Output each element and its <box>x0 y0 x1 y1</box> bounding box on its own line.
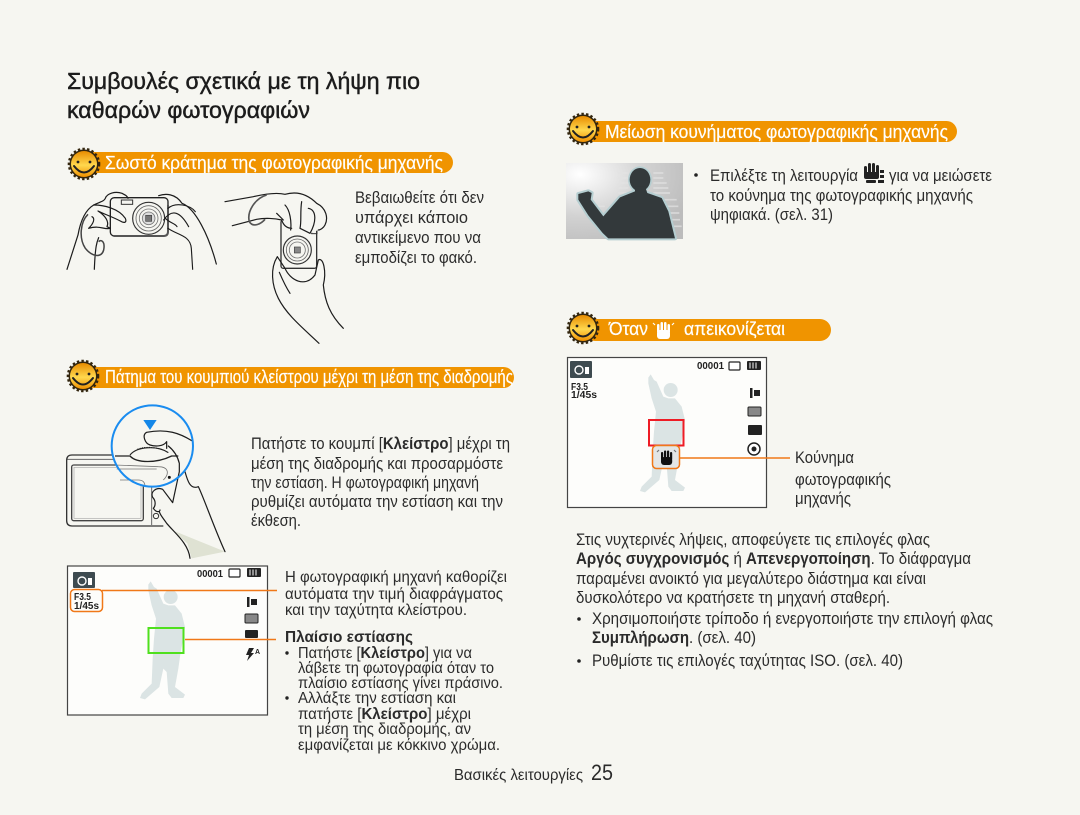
text: focus frame notes <box>285 629 503 754</box>
camera back <box>67 455 173 526</box>
right side icons: A <box>255 649 260 656</box>
label: camera shake: φωτογραφικής <box>795 471 891 489</box>
text: aperture and shutter explanation: και την ταχύτητα κλείστρου. <box>285 602 467 619</box>
illustration: holding camera vertically <box>225 193 343 343</box>
figure silhouette <box>140 581 185 699</box>
footer: section and page number <box>454 760 613 785</box>
text: half-press instructions <box>251 435 510 530</box>
text: focus frame notes: πατήστε [Κλείστρο] μέχρι <box>298 706 471 723</box>
heading: when the shake icon appears: Όταν <box>608 318 648 339</box>
text: select digital stabilisation mode: για να μειώσετε <box>889 167 992 185</box>
icon: white shaking hand <box>653 322 674 339</box>
focus frame in red <box>649 420 684 446</box>
text: check lens obstruction: υπάρχει κάποιο <box>355 209 468 227</box>
text: night shooting advice: παραμένει ανοικτό για μεγαλύτερο διάστημα και είναι <box>576 570 926 588</box>
camera screen: focus frame example <box>68 566 277 715</box>
text: focus frame notes: Αλλάξτε την εστίαση και <box>298 690 456 707</box>
text: night shooting advice <box>576 531 993 670</box>
text: aperture and shutter explanation: Η φωτογραφική μηχανή καθορίζει <box>285 569 507 586</box>
right side icons <box>245 597 260 661</box>
text: select digital stabilisation mode <box>694 163 992 224</box>
aperture and shutter readout: F3.5 <box>74 592 91 603</box>
text: half-press instructions: Πατήστε το κουμπί [Κλείστρο] μέχρι τη <box>251 435 510 453</box>
heading: half-press shutter <box>68 361 514 391</box>
text: check lens obstruction: Βεβαιωθείτε ότι δεν <box>355 189 484 207</box>
shake warning icon <box>652 446 680 468</box>
illustration: holding camera horizontally <box>67 192 216 269</box>
text: select digital stabilisation mode: ψηφιακά. (σελ. 31) <box>710 206 833 224</box>
title <box>67 68 420 123</box>
aperture and shutter readout: 1/45s <box>571 390 597 401</box>
aperture and shutter readout <box>70 590 102 612</box>
title: καθαρών φωτογραφιών <box>67 97 310 123</box>
aperture and shutter readout: F3.5 <box>571 382 588 393</box>
text: night shooting advice: Στις νυχτερινές λήψεις, αποφεύγετε τις επιλογές φλας <box>576 531 930 549</box>
text: aperture and shutter explanation: αυτόματα την τιμή διαφράγματος <box>285 586 503 603</box>
leader line <box>680 457 790 459</box>
leader lines <box>102 590 277 640</box>
focus frame <box>148 628 184 653</box>
text: check lens obstruction: αντικείμενο που να <box>355 229 481 247</box>
text: aperture and shutter explanation <box>285 569 507 619</box>
photo: blurred silhouette <box>566 163 683 239</box>
text: focus frame notes: Πατήστε [Κλείστρο] για να <box>298 645 472 662</box>
label: camera shake: Κούνημα <box>795 449 854 467</box>
heading: when the shake icon appears <box>568 313 831 343</box>
text: select digital stabilisation mode: το κούνημα της φωτογραφικής μηχανής <box>710 187 973 205</box>
text: check lens obstruction: εμποδίζει το φακό. <box>355 249 477 267</box>
hand and zoom circle <box>112 405 225 558</box>
title: Συμβουλές σχετικά με τη λήψη πιο <box>67 68 420 94</box>
illustration: finger half-pressing shutter <box>67 405 225 558</box>
footer: section and page number: 25 <box>591 760 613 785</box>
camera mode icon <box>73 572 95 588</box>
heading: correct camera grip: Σωστό κράτημα της φωτογραφικής μηχανής <box>105 152 443 173</box>
text: night shooting advice: Χρησιμοποιήστε τρίποδο ή ενεργοποιήστε την επιλογή φλας <box>592 610 993 628</box>
camera screen: shake warning example <box>568 358 790 508</box>
footer: section and page number: Βασικές λειτουργίες <box>454 767 583 784</box>
text: night shooting advice: δυσκολότερο να κρατήσετε τη μηχανή σταθερή. <box>576 589 890 607</box>
right side icons <box>748 388 762 455</box>
text: night shooting advice: Ρυθμίστε τις επιλογές ταχύτητας ISO. (σελ. 40) <box>592 652 903 670</box>
icon: DIS hand <box>864 163 884 183</box>
text: night shooting advice: Συμπλήρωση. (σελ. 40) <box>592 629 756 647</box>
status icons top: 00001 <box>697 361 724 372</box>
text: focus frame notes: τη μέση της διαδρομής, αν <box>298 721 471 738</box>
text: half-press instructions: έκθεση. <box>251 512 301 530</box>
status icons top <box>197 568 261 580</box>
text: check lens obstruction <box>355 189 484 267</box>
text: half-press instructions: την εστίαση. Η φωτογραφική μηχανή <box>251 474 479 492</box>
aperture and shutter readout <box>571 382 597 401</box>
figure silhouette <box>640 374 685 492</box>
heading: correct camera grip <box>69 149 453 179</box>
text: half-press instructions: ρυθμίζει αυτόματα την εστίαση και την <box>251 493 503 511</box>
heading: half-press shutter: Πάτημα του κουμπιού κλείστρου μέχρι τη μέση της διαδρομής <box>105 367 513 387</box>
text: focus frame notes: Πλαίσιο εστίασης <box>285 629 413 646</box>
heading: reducing camera shake <box>568 114 957 144</box>
label: camera shake: μηχανής <box>795 490 851 508</box>
status icons top: 00001 <box>197 569 223 580</box>
camera mode icon <box>570 361 592 378</box>
text: focus frame notes: πλαίσιο εστίασης γίνει πράσινο. <box>298 675 503 692</box>
status icons top <box>697 361 761 372</box>
text: focus frame notes: λάβετε τη φωτογραφία όταν το <box>298 660 494 677</box>
text: focus frame notes: εμφανίζεται με κόκκινο χρώμα. <box>298 737 500 754</box>
text: half-press instructions: μέση της διαδρομής και προσαρμόστε <box>251 455 503 473</box>
heading: when the shake icon appears: απεικονίζεται <box>684 318 785 339</box>
text: select digital stabilisation mode: Επιλέξτε τη λειτουργία <box>710 167 858 185</box>
text: night shooting advice: Αργός συγχρονισμός ή Απενεργοποίηση. Το διάφραγμα <box>576 550 971 568</box>
aperture and shutter readout: 1/45s <box>74 601 99 612</box>
heading: reducing camera shake: Μείωση κουνήματος φωτογραφικής μηχανής <box>605 121 948 142</box>
label: camera shake <box>795 449 891 508</box>
